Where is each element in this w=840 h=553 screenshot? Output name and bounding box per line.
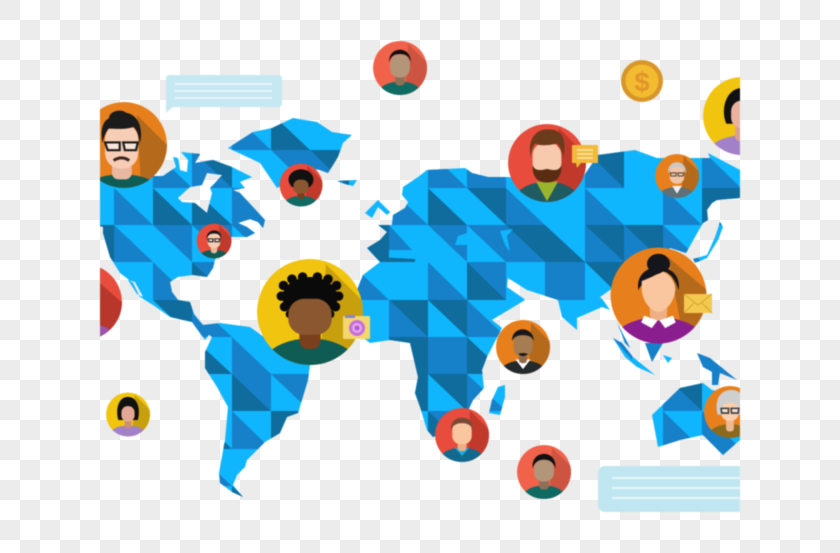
icon: gold dollar coin: $ xyxy=(634,67,650,97)
icon: folder with flower xyxy=(343,315,370,339)
land: Iceland xyxy=(337,180,357,186)
land: South America xyxy=(192,313,310,497)
avatar: man with glasses on orange xyxy=(99,101,168,189)
land: Sumatra xyxy=(613,338,655,375)
avatar: old man on orange xyxy=(654,153,700,199)
land: Borneo xyxy=(645,343,663,362)
land: New Guinea xyxy=(697,353,737,385)
land: North America xyxy=(100,152,265,340)
icon: chat bubble xyxy=(572,145,598,168)
avatar: small man with glasses on red xyxy=(196,222,232,260)
speech bubble: top left xyxy=(166,75,282,113)
icon: gold dollar coin xyxy=(621,60,663,102)
land: Malay sliver xyxy=(617,322,630,348)
avatar: partial figure on red, left edge xyxy=(99,267,123,337)
avatar: man in suit on orange xyxy=(495,319,551,375)
inland seas, lighter spots xyxy=(455,229,513,252)
world map xyxy=(99,117,741,498)
land: Australia xyxy=(652,383,740,455)
land: Eurasia and Africa xyxy=(357,150,740,437)
mid blue triangles xyxy=(114,113,741,486)
land: Madagascar xyxy=(489,385,505,415)
avatar: woman with bun on orange xyxy=(610,246,708,344)
avatar: afro on red, Greenland xyxy=(278,162,324,208)
avatar: large afro on yellow xyxy=(256,258,364,366)
avatar: man on coral, top xyxy=(372,40,428,96)
land: Greenland xyxy=(228,118,352,188)
avatar: small woman on yellow xyxy=(105,392,151,438)
dark blue triangles xyxy=(100,123,740,498)
speech bubble: bottom right xyxy=(598,466,758,512)
land: small island xyxy=(663,355,672,363)
avatar: man on coral, bottom xyxy=(516,444,572,500)
icon: envelope xyxy=(684,294,712,313)
avatar: woman on yellow, top right xyxy=(702,76,741,156)
land: Japan xyxy=(693,222,723,263)
avatar: man on red, Africa tip xyxy=(434,407,490,463)
avatar: bearded man on red xyxy=(507,123,587,203)
land: Scandinavia hook xyxy=(365,200,390,218)
mosaic triangles xyxy=(100,123,740,498)
avatar: old woman on orange, right edge xyxy=(703,385,741,439)
